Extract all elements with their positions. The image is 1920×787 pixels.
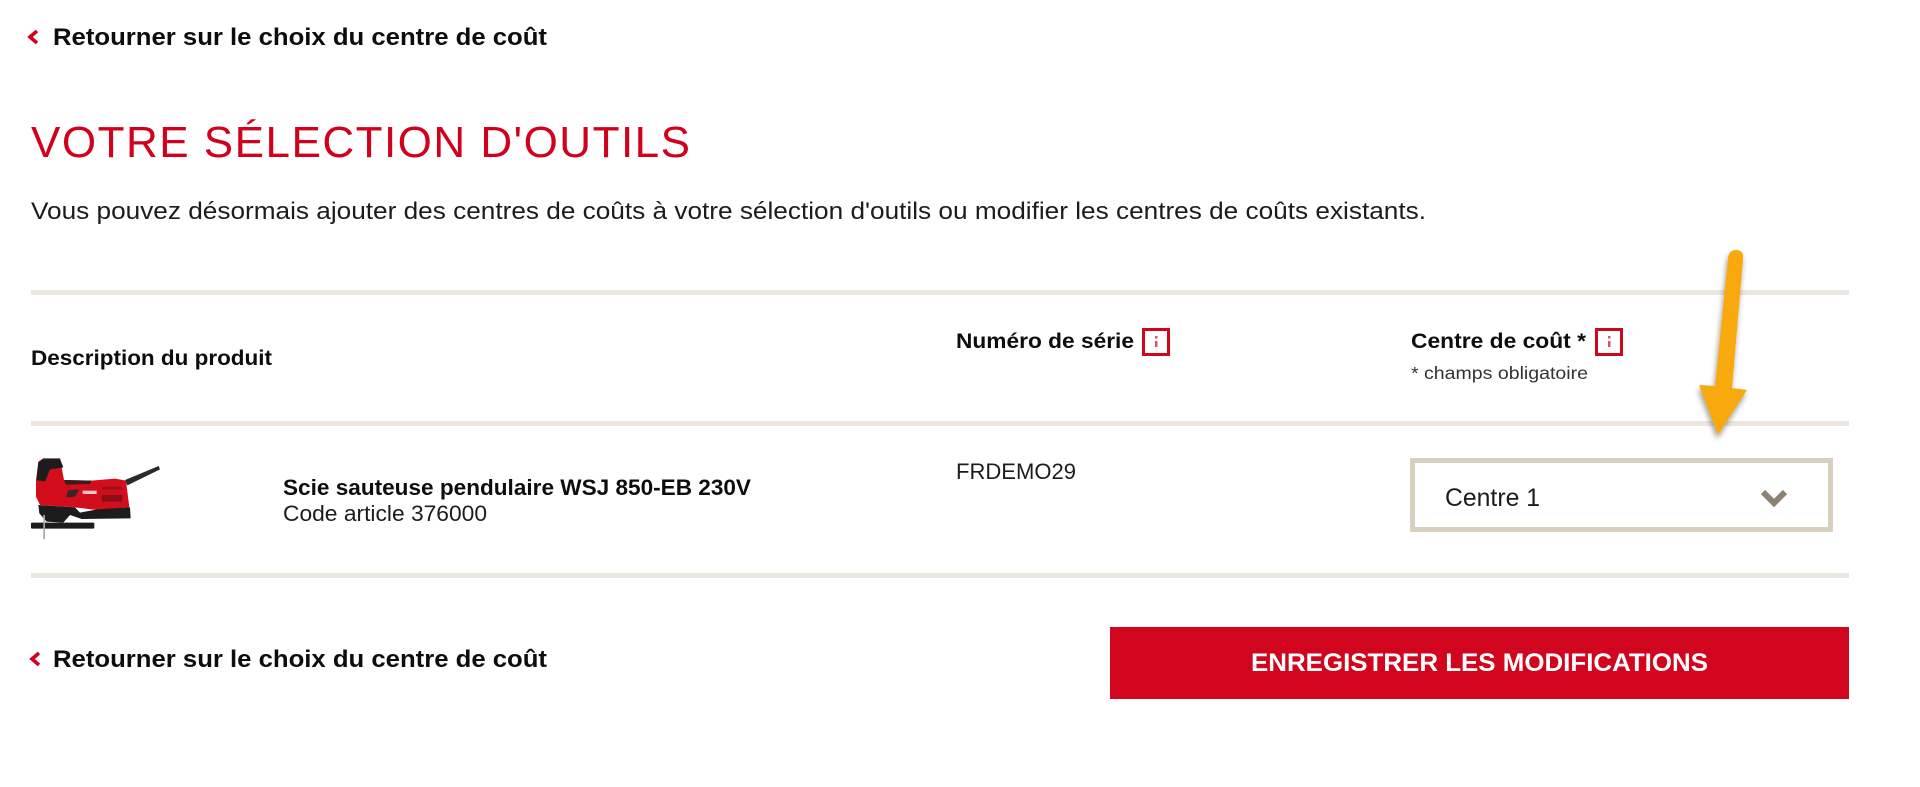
- product name and code: Code article 376000: [283, 501, 487, 526]
- serial number value: FRDEMO29: [956, 459, 1076, 484]
- top back link: Retourner sur le choix du centre de coût: [53, 24, 547, 51]
- save button: [1110, 627, 1849, 699]
- arrow: [1699, 250, 1747, 435]
- dropdown: cost centre: Centre 1: [1445, 484, 1540, 512]
- product image: jigsaw: [31, 458, 160, 539]
- column header: serial number: Numéro de série: [956, 330, 1134, 353]
- column header: cost centre: Centre de coût *: [1411, 330, 1587, 353]
- product name and code: Scie sauteuse pendulaire WSJ 850-EB 230V: [283, 475, 751, 500]
- icon: info: [1596, 330, 1622, 354]
- required note: * champs obligatoire: [1411, 363, 1588, 383]
- dropdown: cost centre: [1412, 460, 1830, 530]
- icon: info: [1144, 330, 1168, 354]
- column header: product description: Description du produit: [31, 347, 272, 370]
- intro text: Vous pouvez désormais ajouter des centres de coûts à votre sélection d'outils ou modifier les centres de coûts existants.: [31, 198, 1426, 225]
- column header: cost centre: [1411, 330, 1622, 383]
- title: VOTRE SÉLECTION D'OUTILS: [31, 118, 690, 167]
- product name and code: [283, 475, 751, 526]
- save button: ENREGISTRER LES MODIFICATIONS: [1251, 649, 1708, 677]
- icon: chevron: [1763, 492, 1785, 503]
- bottom back link: Retourner sur le choix du centre de coût: [53, 646, 547, 673]
